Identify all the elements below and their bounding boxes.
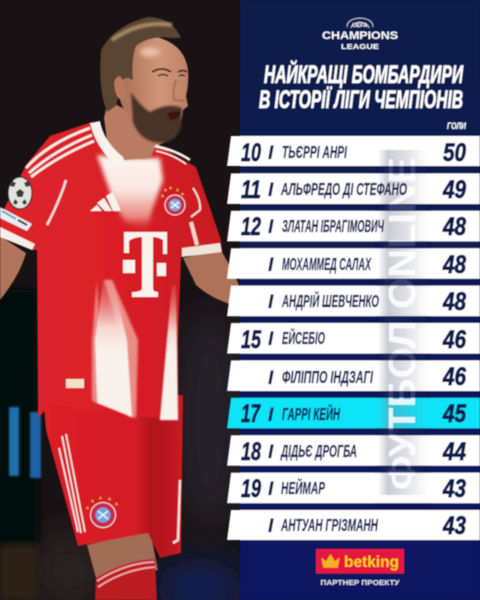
watermark: vertical site name [375,150,431,510]
adidas logo [90,192,121,211]
neck [104,100,165,160]
row 11 [241,176,466,204]
logo: betking sponsor: betking [344,554,399,571]
row 18 [241,438,466,466]
logo: UEFA Champions League: CHAMPIONS [322,30,398,42]
logo: betking sponsor [316,549,404,574]
row 19: 19 [241,475,261,503]
champions league sleeve badge [8,177,32,209]
title [259,59,464,114]
photo: stadium background [0,0,245,600]
row 19: НЕЙМАР [281,477,325,498]
row tied 12 Salah: МОХАММЕД САЛАХ [282,254,372,274]
row tied 19 Griezmann: I [268,516,274,537]
beard [131,92,182,143]
logo: UEFA Champions League [322,18,398,51]
row 17 highlighted Kane: ГАРРІ КЕЙН [282,403,340,424]
row 15: I [268,329,274,350]
row 18: 44 [442,438,466,466]
player arms [0,236,239,305]
row 17 highlighted Kane: I [268,405,274,426]
player leg and sock [87,530,158,600]
row tied 12 Shevchenko: 48 [442,288,466,316]
row backgrounds [227,136,480,540]
rows: ranking table [241,139,467,540]
head [100,17,188,143]
shorts badge [86,496,118,528]
row tied 19 Griezmann: 43 [442,512,466,540]
row 15: 15 [241,326,262,354]
row tied 12 Salah: I [268,255,274,276]
row 19: 43 [442,475,466,503]
crest [161,186,185,215]
row tied 15 Inzaghi [268,363,467,391]
forehead highlight [140,47,160,57]
panel: navy background [240,0,480,600]
row 10: 50 [443,139,466,167]
chest white fade [97,155,163,232]
column header: goals: ГОЛИ [447,121,466,132]
shoulder stripes [26,128,190,177]
row 15: 46 [442,326,467,354]
right stripe [160,285,178,420]
row 18: I [268,442,274,463]
watermark: vertical site name: ФУТБОЛ ONLINE [382,157,424,490]
row 10: I [268,143,274,164]
logo: UEFA Champions League: UEFA [352,23,368,29]
row 19: I [268,479,274,500]
row 12: 12 [241,213,261,241]
shorts [43,395,183,558]
logo: UEFA Champions League: LEAGUE [341,42,379,51]
row tied 15 Inzaghi: ФІЛІППО ІНДЗАГІ [282,367,374,387]
jersey [0,100,222,421]
sleeve cuffs [0,227,35,250]
row 12: I [268,217,274,238]
row 17 highlighted Kane [241,400,467,428]
t logo [123,232,167,297]
nose shadow [173,80,185,101]
row tied 12 Shevchenko: I [268,292,274,313]
row tied 12 Salah [268,251,466,279]
row 17 highlighted Kane: 45 [442,400,467,428]
row tied 19 Griezmann: АНТУАН ГРІЗМАНН [280,515,378,535]
logo ball arcs [347,18,373,28]
row 10: ТЬЄРРІ АНРІ [282,142,348,162]
centre stripe [92,280,138,418]
ear [114,76,126,100]
hair [100,17,181,112]
row 15: ЕЙСЕБІО [282,327,325,348]
row tied 12 Salah: 48 [442,251,466,279]
collar [90,121,125,168]
row tied 19 Griezmann [268,512,466,540]
side piping [47,180,66,225]
row 10: 10 [241,139,261,167]
row 19 [241,475,466,503]
sleeve patch [0,207,32,231]
row 12 [241,213,466,241]
row 10 [241,139,466,167]
mouth [167,111,181,120]
row 11: 49 [442,176,466,204]
row 17 highlighted Kane: 17 [241,400,261,428]
row 18: ДІДЬЄ ДРОГБА [280,441,357,461]
partner caption: ПАРТНЕР ПРОЕКТУ [320,578,400,587]
row tied 12 Shevchenko: АНДРІЙ ШЕВЧЕНКО [281,290,379,311]
row tied 15 Inzaghi: I [268,368,274,389]
hem label [66,379,84,388]
background figure with blue stripes [0,290,41,600]
row 11: I [268,180,274,201]
eyes [152,69,187,72]
row 18: 18 [241,438,261,466]
icon: crown [321,554,340,568]
row 12: ЗЛАТАН ІБРАГІМОВИЧ [282,216,384,236]
row tied 15 Inzaghi: 46 [442,363,467,391]
row 15 [241,326,467,354]
row 11: 11 [241,176,261,204]
row 12: 48 [442,213,466,241]
row tied 12 Shevchenko [268,288,466,316]
